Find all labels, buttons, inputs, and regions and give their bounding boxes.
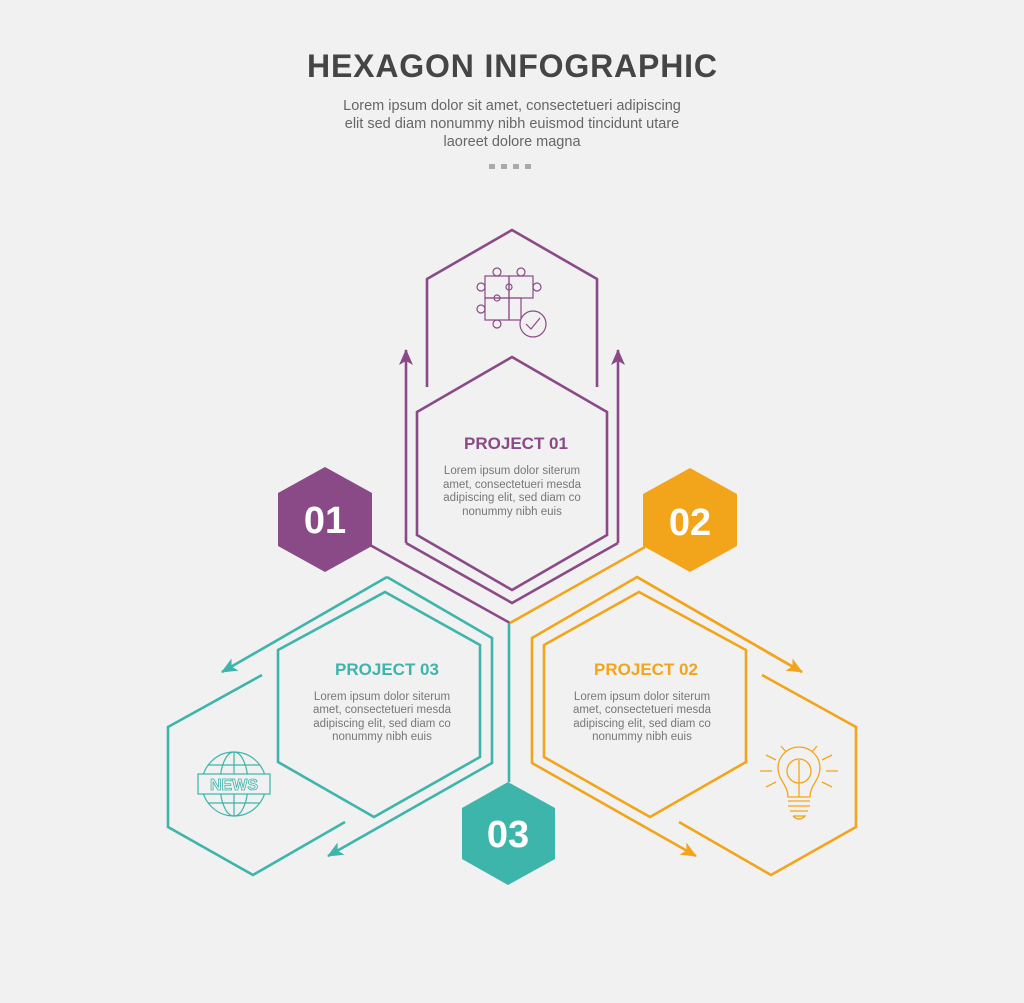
subtitle: Lorem ipsum dolor sit amet, consectetueri adipiscing <box>343 98 681 114</box>
project 02 text: nonummy nibh euis <box>592 731 692 743</box>
project 01 text: PROJECT 01 <box>464 434 568 453</box>
icon: news globe: NEWS <box>210 777 258 794</box>
teal group: project 03 <box>168 577 509 875</box>
project 03 text: PROJECT 03 <box>335 660 439 679</box>
badge 03: 03 <box>487 814 529 856</box>
project 01 text: amet, consectetueri mesda <box>443 479 582 491</box>
badge 01 <box>278 467 372 572</box>
inner hexagon <box>544 592 746 817</box>
project 03 text: nonummy nibh euis <box>332 731 432 743</box>
project 03 text <box>313 660 452 743</box>
badge 02: 02 <box>669 502 711 544</box>
project 02 text: amet, consectetueri mesda <box>573 704 712 716</box>
inner hexagon <box>278 592 480 817</box>
badge 03 <box>462 782 555 885</box>
big left hexagon segment <box>168 675 345 875</box>
badge 02 <box>643 468 737 572</box>
icon: bulb <box>760 746 838 819</box>
project 01 text: Lorem ipsum dolor siterum <box>444 465 580 477</box>
icon: news globe <box>198 752 270 816</box>
dots <box>489 164 531 169</box>
arrow U path <box>406 543 618 603</box>
project 02 text: Lorem ipsum dolor siterum <box>574 691 710 703</box>
big right hexagon segment <box>679 675 856 875</box>
project 03 text: Lorem ipsum dolor siterum <box>314 691 450 703</box>
connector from badge 01 <box>370 545 510 623</box>
top open hexagon <box>427 230 597 387</box>
project 01 text: adipiscing elit, sed diam co <box>443 492 581 504</box>
subtitle <box>343 98 681 150</box>
project 03 text: adipiscing elit, sed diam co <box>313 718 451 730</box>
icon: puzzle <box>477 268 546 337</box>
project 02 text: PROJECT 02 <box>594 660 698 679</box>
subtitle: laoreet dolore magna <box>443 134 581 150</box>
project 03 text: amet, consectetueri mesda <box>313 704 452 716</box>
project 01 text <box>443 434 582 518</box>
badge 01: 01 <box>304 500 346 542</box>
outer arrow path <box>222 577 387 672</box>
connector to badge 03 <box>508 623 510 782</box>
project 02 text <box>573 660 712 743</box>
connector from badge 02 <box>510 547 645 623</box>
title: HEXAGON INFOGRAPHIC <box>307 48 717 84</box>
orange group: project 02 <box>510 547 856 875</box>
outer arrow path <box>532 577 802 856</box>
inner hexagon <box>417 357 607 590</box>
project 01 text: nonummy nibh euis <box>462 506 562 518</box>
purple group: project 01 <box>370 230 618 623</box>
project 02 text: adipiscing elit, sed diam co <box>573 718 711 730</box>
subtitle: elit sed diam nonummy nibh euismod tincidunt utare <box>345 116 679 132</box>
